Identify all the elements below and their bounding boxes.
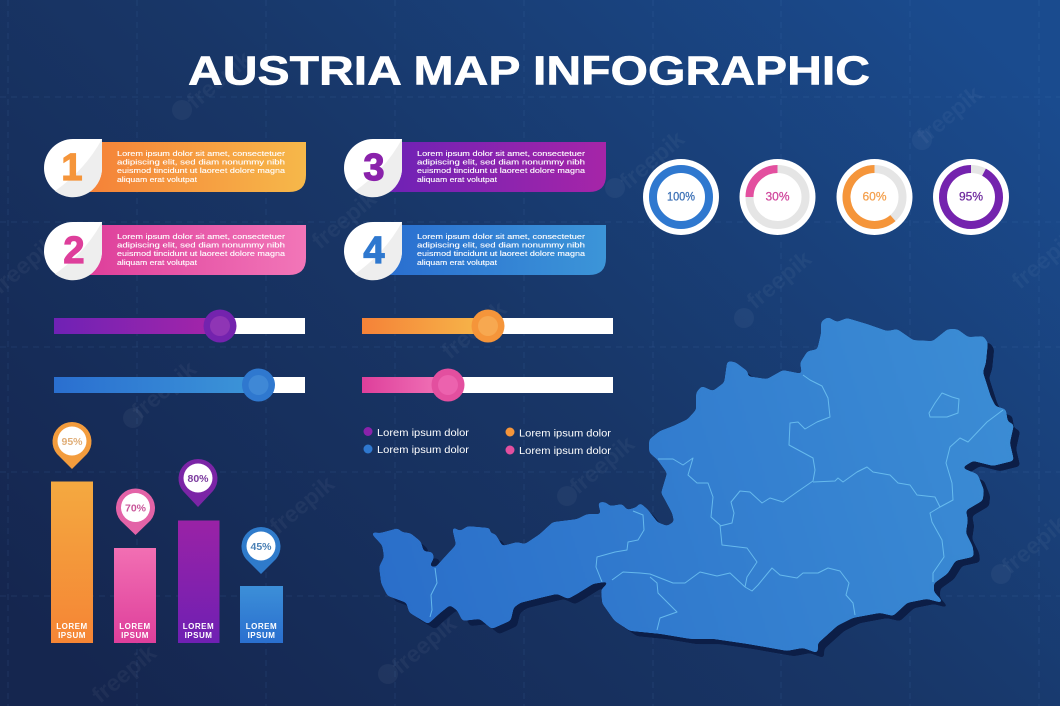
panel: text card 3: aliquam erat volutpat — [417, 175, 498, 184]
slider: purple — [54, 310, 305, 342]
watermarks: freepik — [872, 385, 946, 454]
panel: text card 2: euismod tincidunt ut laoreet dolore magna — [117, 249, 286, 258]
slider: blue — [54, 368, 305, 402]
bar: 80%: LOREM — [183, 622, 214, 631]
bar: 45%: LOREM — [246, 622, 277, 631]
donut: 100%: 100% — [667, 192, 695, 204]
title: AUSTRIA MAP INFOGRAPHIC — [188, 48, 870, 94]
map state borders — [430, 375, 1003, 630]
watermarks: freepik — [87, 639, 161, 706]
bar: 70%: 70% — [125, 502, 147, 514]
donut: 60% — [836, 159, 912, 235]
panel: text card 4 — [344, 222, 606, 280]
bar: 95%: LOREM — [56, 622, 88, 631]
watermarks: freepik — [692, 565, 766, 634]
bar: 70%: IPSUM — [121, 631, 149, 640]
bar: 95%: IPSUM — [58, 631, 86, 640]
panel: text card 4: 4 — [363, 230, 385, 272]
panel: text card 2: adipiscing elit, sed diam nonummy nibh — [117, 241, 285, 250]
legend — [364, 427, 612, 457]
panel: text card 4: Lorem ipsum dolor sit amet, consectetuer — [417, 232, 586, 241]
watermarks: freepik — [912, 80, 986, 149]
panel: text card 2 — [44, 222, 306, 280]
bar: 80%: IPSUM — [185, 631, 212, 640]
panel: text card 3: 3 — [363, 147, 385, 189]
watermarks: freepik — [437, 295, 511, 364]
watermarks: freepik — [127, 355, 201, 424]
map shadow — [379, 324, 1020, 658]
legend: Lorem ipsum dolor — [377, 427, 470, 439]
legend: Lorem ipsum dolor — [519, 428, 612, 440]
watermarks: freepik — [565, 430, 639, 499]
donut: 100% — [643, 159, 719, 235]
panel: text card 1: aliquam erat volutpat — [117, 175, 198, 184]
panel: text card 4: euismod tincidunt ut laoreet dolore magna — [417, 249, 586, 258]
map: Austria — [372, 318, 1020, 658]
watermarks: freepik — [307, 185, 381, 254]
slider: orange — [362, 310, 613, 342]
donut: 95%: 95% — [959, 192, 983, 204]
bar: 45%: IPSUM — [248, 631, 275, 640]
panel: text card 4: aliquam erat volutpat — [417, 258, 498, 267]
panel: text card 2: Lorem ipsum dolor sit amet, consectetuer — [117, 232, 286, 241]
slider: pink — [362, 368, 613, 402]
bar: 95%: 95% — [61, 436, 83, 448]
watermarks: freepik — [387, 610, 461, 679]
panel: text card 3 — [344, 139, 606, 197]
donut: 95% — [933, 159, 1009, 235]
bar: 70% — [114, 489, 156, 643]
panel: text card 1: adipiscing elit, sed diam nonummy nibh — [117, 158, 285, 167]
panel: text card 3: adipiscing elit, sed diam nonummy nibh — [417, 158, 585, 167]
donut: 30% — [740, 159, 816, 235]
legend: Lorem ipsum dolor — [377, 444, 470, 456]
bar: 45% — [240, 527, 283, 643]
panel: text card 2: aliquam erat volutpat — [117, 258, 198, 267]
bar: 80%: 80% — [187, 473, 209, 485]
watermarks: freepik — [182, 45, 256, 114]
panel: text card 1: 1 — [61, 147, 83, 189]
bar: 80% — [178, 459, 220, 643]
map body — [372, 318, 1013, 652]
bar: 45%: 45% — [250, 541, 272, 553]
watermarks: freepik — [615, 125, 689, 194]
panel: text card 3: euismod tincidunt ut laoreet dolore magna — [417, 166, 586, 175]
bar: 70%: LOREM — [119, 622, 151, 631]
panel: text card 3: Lorem ipsum dolor sit amet, consectetuer — [417, 149, 586, 158]
watermarks: freepik — [742, 245, 816, 314]
panel: text card 4: adipiscing elit, sed diam nonummy nibh — [417, 241, 585, 250]
legend: Lorem ipsum dolor — [519, 445, 612, 457]
panel: text card 1 — [44, 139, 306, 197]
donut: 30%: 30% — [766, 192, 790, 204]
bar chart — [51, 422, 283, 643]
panel: text card 2: 2 — [63, 230, 85, 272]
panel: text card 1: euismod tincidunt ut laoreet dolore magna — [117, 166, 286, 175]
donut: 60%: 60% — [862, 192, 886, 204]
bar: 95% — [51, 422, 93, 643]
watermarks: freepik — [265, 470, 339, 539]
panel: text card 1: Lorem ipsum dolor sit amet, consectetuer — [117, 149, 286, 158]
